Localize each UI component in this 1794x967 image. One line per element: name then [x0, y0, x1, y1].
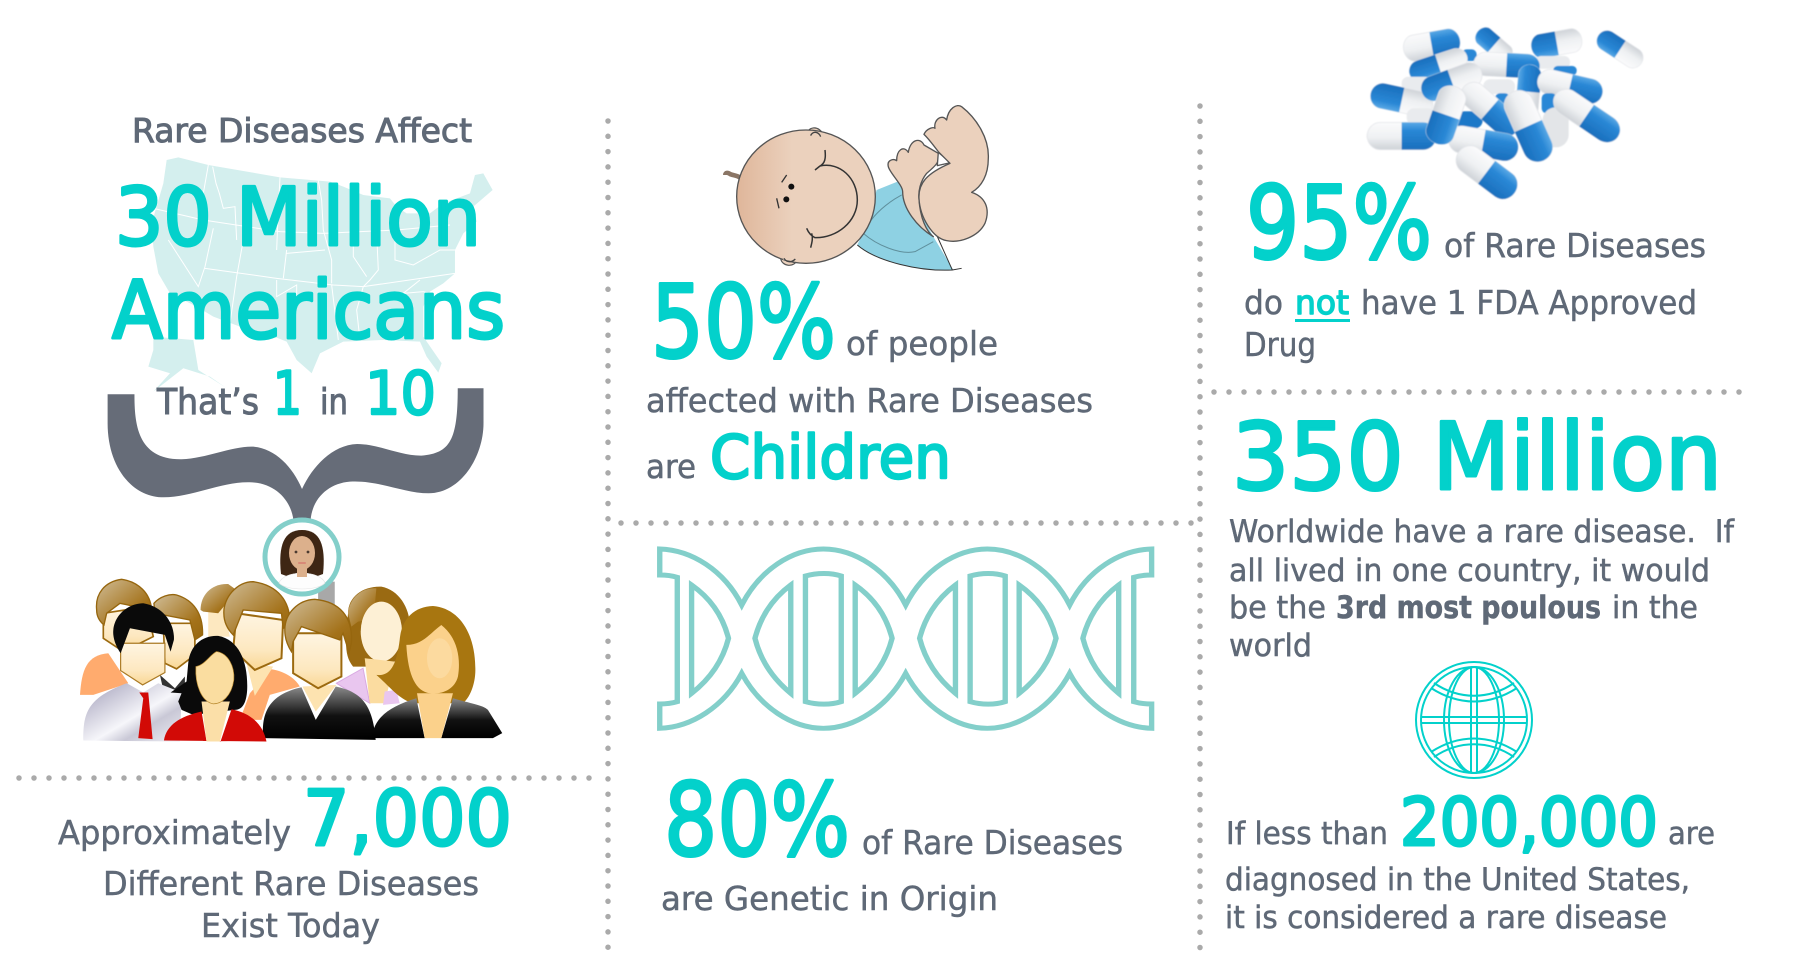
text: diagnosed in the united states: diagnosed in the United States, — [1225, 862, 1690, 898]
icon: globe — [1416, 662, 1532, 778]
text: have 1 fda approved: have 1 FDA Approved — [1361, 283, 1697, 322]
text: affected with rare diseases: affected with Rare Diseases — [646, 381, 1093, 420]
text: worldwide line 3 — [1229, 590, 1698, 626]
text: worldwide line 3: be the — [1229, 590, 1326, 626]
text: it is considered a rare disease: it is considered a rare disease — [1225, 900, 1667, 936]
curly brace — [108, 388, 484, 520]
stat: 30 million: 30 Million — [115, 171, 481, 264]
text: are: are — [646, 447, 696, 486]
text: worldwide line 2: all lived in one country, it would — [1229, 553, 1710, 589]
heading: rare diseases affect: Rare Diseases Affect — [132, 111, 472, 150]
text: are: are — [1668, 816, 1715, 852]
text: are genetic in origin: are Genetic in Origin — [661, 879, 998, 918]
stat: 50%: 50% — [651, 263, 836, 381]
icon: baby — [725, 106, 988, 270]
stat: 80%: 80% — [664, 761, 850, 879]
stat: americans: Americans — [112, 264, 505, 357]
text: worldwide line 1: Worldwide have a rare disease. If — [1229, 514, 1735, 550]
text: of rare diseases: of Rare Diseases — [862, 823, 1123, 862]
stat: 200,000: 200,000 — [1400, 784, 1658, 861]
text: worldwide line 4: world — [1229, 628, 1312, 664]
icon: capsules — [1367, 24, 1647, 204]
stat: 1: 1 — [273, 359, 302, 429]
text: in: in — [320, 382, 348, 423]
stat: 7,000: 7,000 — [303, 775, 512, 864]
stat: children: Children — [710, 423, 951, 493]
text: if less than: If less than — [1226, 816, 1388, 852]
text: do: do — [1244, 283, 1283, 322]
text: not underlined: not — [1295, 283, 1349, 322]
text: different rare diseases: Different Rare Diseases — [103, 864, 479, 903]
text: drug: Drug — [1244, 325, 1316, 364]
text: worldwide line 3: 3rd most poulous — [1336, 590, 1601, 626]
stat: 350 million: 350 Million — [1232, 403, 1722, 511]
panel: worldwide — [1225, 403, 1735, 936]
text: worldwide line 3: in the — [1612, 590, 1698, 626]
stat: 95%: 95% — [1246, 164, 1432, 282]
panel: 30 million americans — [58, 111, 512, 945]
stat: 10: 10 — [365, 359, 436, 429]
text: exist today: Exist Today — [201, 906, 380, 945]
map of united states — [148, 157, 493, 392]
icon: group of people — [80, 579, 502, 741]
icon: dna helix — [660, 549, 1152, 728]
icon: highlighted woman in circle — [265, 520, 339, 594]
panel: genetic origin — [660, 549, 1152, 918]
panel: fda approved drugs — [1244, 24, 1706, 364]
text: approximately: Approximately — [58, 813, 291, 852]
text: that's: That’s — [156, 382, 259, 423]
text: of people: of people — [846, 324, 998, 363]
panel: children — [646, 106, 1093, 493]
text: of rare diseases: of Rare Diseases — [1444, 226, 1706, 265]
